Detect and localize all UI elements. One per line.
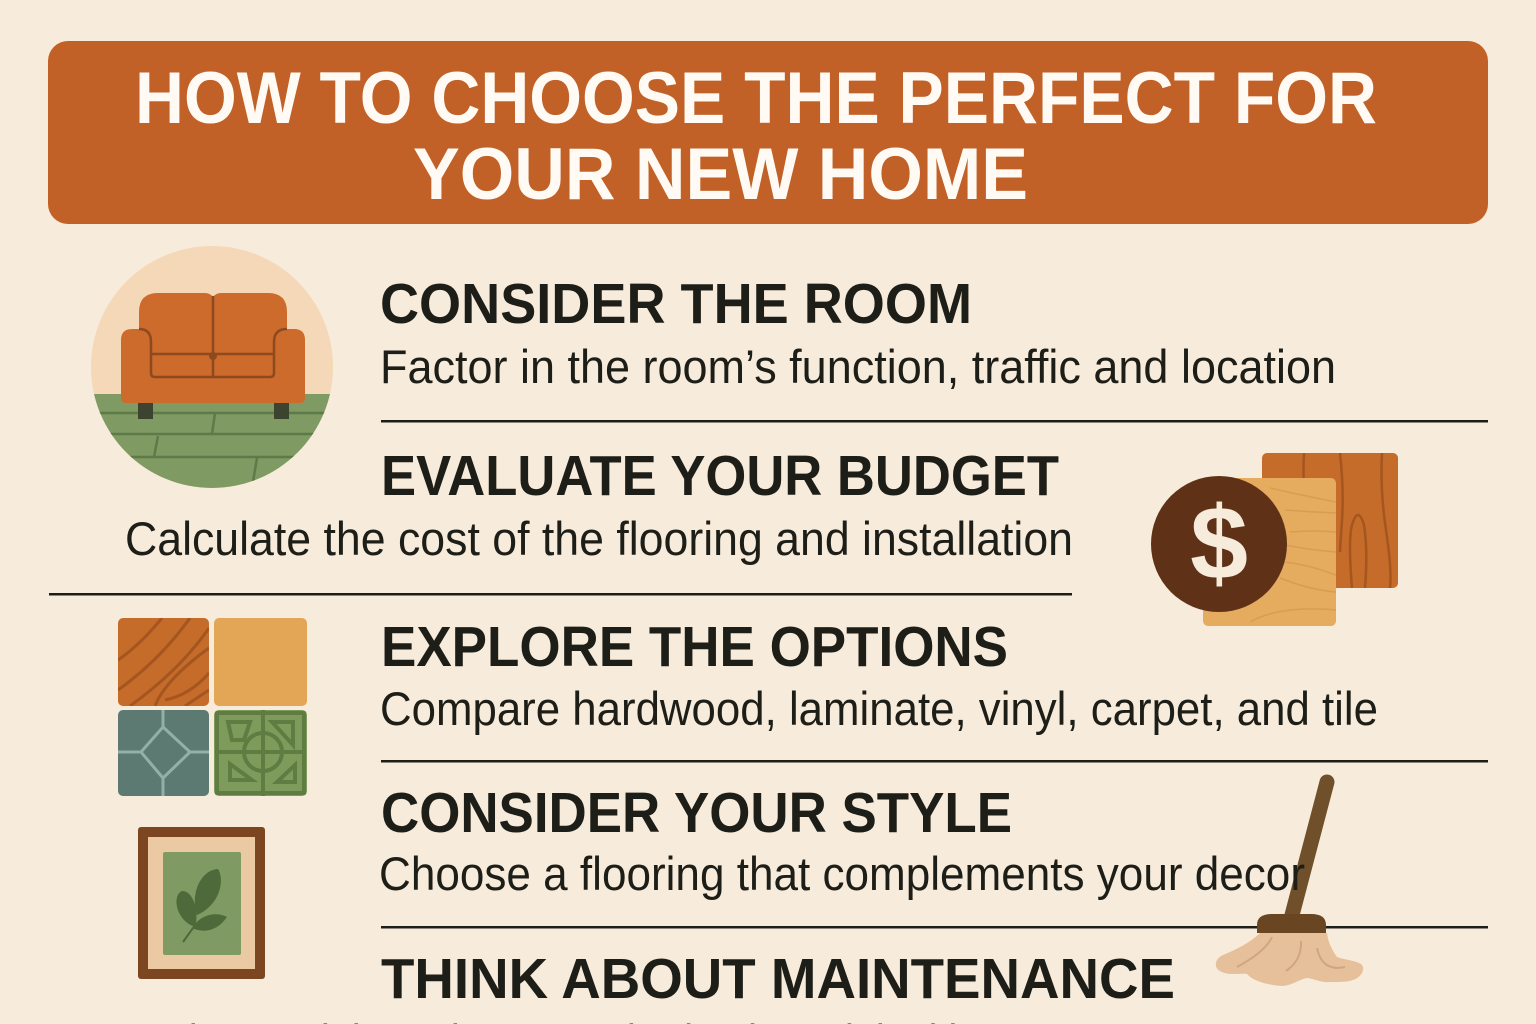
title text xyxy=(135,58,1377,215)
title text: HOW TO CHOOSE THE PERFECT FOR xyxy=(135,58,1377,139)
icon: sofa on green floor xyxy=(91,246,333,488)
icon: wood planks and dollar coin xyxy=(1151,453,1398,626)
text: evaluate your budget body: Calculate the cost of the flooring and installation xyxy=(125,512,1073,565)
title text: YOUR NEW HOME xyxy=(413,134,1028,215)
heading: evaluate your budget: EVALUATE YOUR BUDGET xyxy=(381,444,1059,508)
heading: explore the options: EXPLORE THE OPTIONS xyxy=(381,615,1008,679)
icon: wood planks and dollar coin: $ xyxy=(1190,486,1248,602)
heading: consider your style: CONSIDER YOUR STYLE xyxy=(381,781,1012,845)
text: consider your style body: Choose a flooring that complements your decor xyxy=(379,847,1305,900)
heading: think about maintenance: THINK ABOUT MAINTENANCE xyxy=(381,947,1175,1011)
text: consider the room body: Factor in the room’s function, traffic and location xyxy=(380,340,1336,393)
heading: consider the room: CONSIDER THE ROOM xyxy=(380,272,972,336)
title banner xyxy=(48,41,1488,224)
icon: mop xyxy=(1216,782,1363,986)
icon: flooring samples xyxy=(118,618,307,796)
icon: framed leaf picture xyxy=(138,827,265,979)
text: explore the options body: Compare hardwood, laminate, vinyl, carpet, and tile xyxy=(380,682,1378,735)
